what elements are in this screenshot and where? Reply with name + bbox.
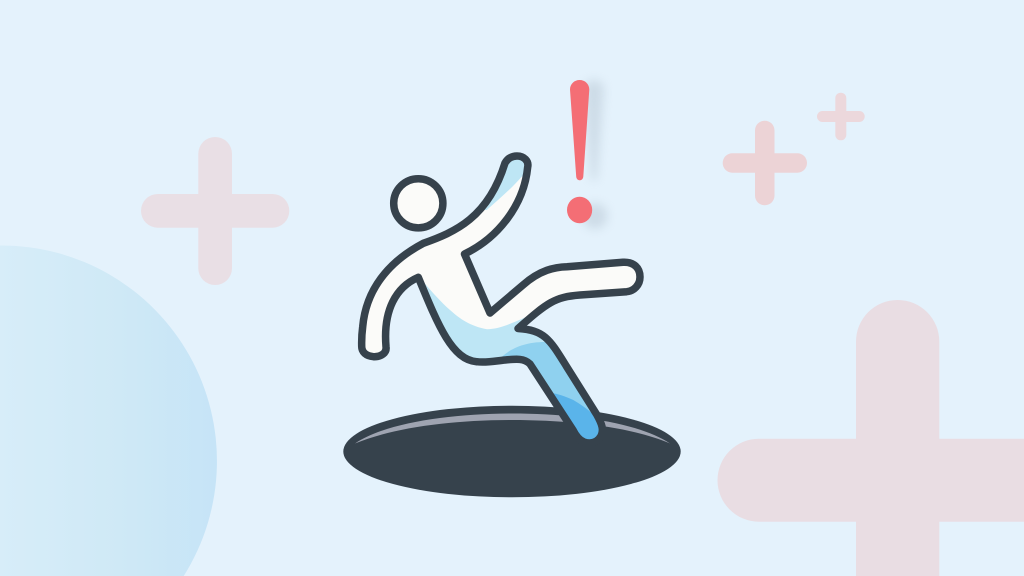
small plus top right (817, 93, 865, 140)
figure head (394, 179, 443, 228)
exclamation stroke (570, 80, 589, 180)
foot dark shade (554, 393, 599, 440)
exclamation mark (567, 80, 608, 229)
falling figure (362, 150, 640, 450)
huge plus bottom right (718, 300, 1024, 576)
large plus left (141, 137, 289, 285)
body white fill (362, 156, 640, 443)
medium plus top right (723, 121, 807, 205)
decorative circle bottom left (0, 245, 217, 576)
hole ellipse (343, 406, 681, 497)
body shading (425, 160, 599, 440)
leg mid shade (502, 342, 591, 412)
body outline (362, 156, 640, 443)
figure body (362, 150, 640, 450)
hole (343, 406, 681, 497)
leg light shade (425, 284, 545, 358)
exclamation shadow (582, 80, 608, 229)
hole rim highlight (355, 414, 670, 444)
exclamation dot (567, 197, 592, 223)
arm shade (484, 160, 524, 210)
